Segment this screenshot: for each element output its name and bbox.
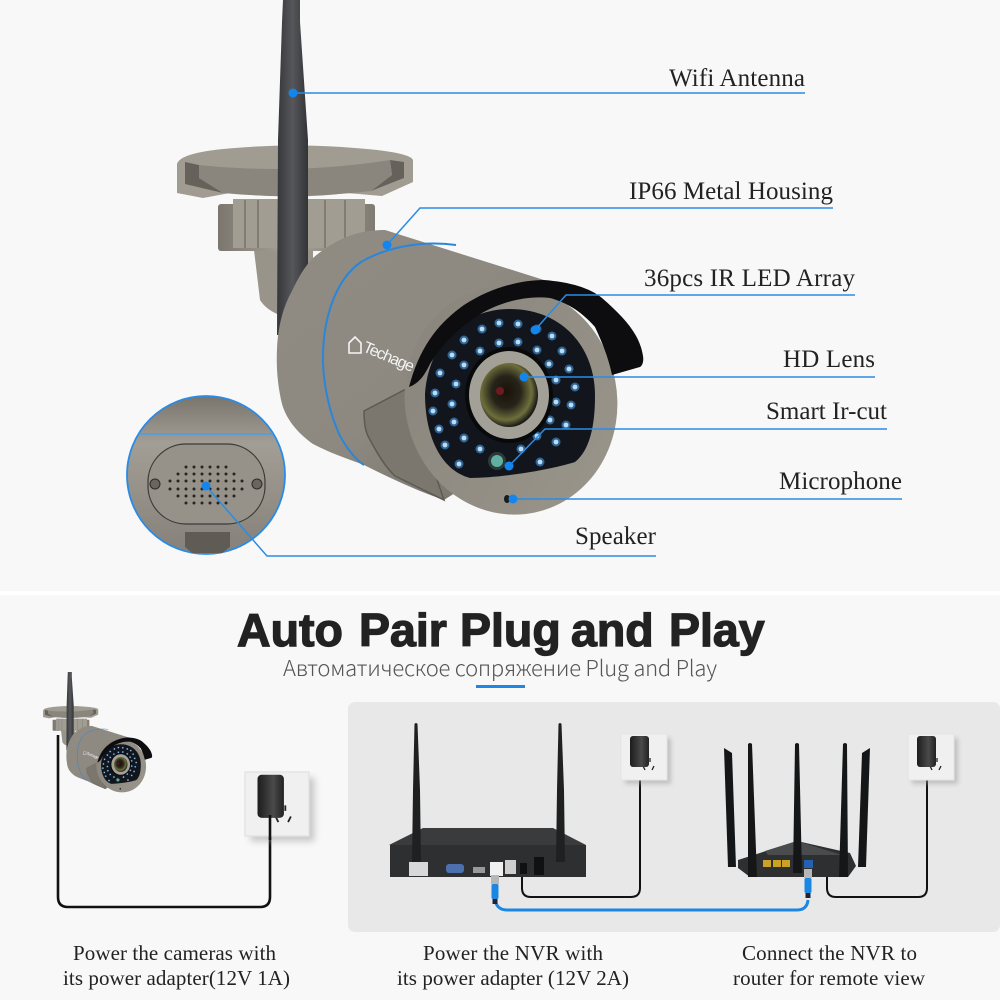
- NVR antennas: [412, 723, 421, 862]
- speaker grille holes: [168, 466, 244, 504]
- router antennas: [724, 748, 736, 867]
- speaker plate: [148, 444, 265, 524]
- step 1 diagram: camera to power outlet: [43, 672, 314, 907]
- security camera illustration: [177, 0, 643, 535]
- caption: step 3: router for remote view: [733, 966, 926, 990]
- caption: step 3: Connect the NVR to: [742, 941, 917, 965]
- speaker bracket: [185, 532, 230, 553]
- white divider band: [0, 591, 1000, 595]
- wall socket with adapter: [245, 772, 314, 842]
- caption: step 3: [733, 941, 926, 990]
- caption: step 1: [63, 941, 290, 990]
- router LAN ports: [763, 860, 790, 867]
- RJ45 plug: router side: [804, 869, 812, 898]
- caption: step 2: [397, 941, 629, 990]
- callout: Speaker: Speaker: [575, 523, 657, 550]
- bottom background panel: [0, 595, 1000, 1000]
- callout: Speaker: [202, 482, 657, 556]
- blue network cable: [495, 900, 808, 910]
- wall socket: router: [908, 734, 958, 784]
- accent bar: [476, 685, 525, 688]
- power cable over socket: [269, 815, 271, 840]
- subtitle: Автоматическое сопряжение Plug and Play: [283, 651, 717, 683]
- callout: Smart Ir-cut: [504, 398, 887, 470]
- NVR recorder: [389, 723, 586, 877]
- caption: step 2: Power the NVR with: [423, 941, 604, 965]
- NVR power cable: [522, 762, 640, 897]
- cable: camera power: [58, 735, 270, 907]
- panel: NVR and router connection: [348, 702, 1000, 932]
- callout: IP66 Metal Housing: [382, 178, 834, 250]
- caption: step 1: its power adapter(12V 1A): [63, 966, 290, 990]
- RJ45 plug: NVR side: [491, 875, 499, 904]
- router WAN port: [804, 860, 813, 868]
- caption: step 1: Power the cameras with: [73, 941, 276, 965]
- title: Play: [669, 604, 765, 656]
- top background panel: [0, 0, 1000, 591]
- title: Plug: [460, 604, 561, 656]
- title: and: [571, 604, 654, 656]
- inset: speaker close-up: [127, 396, 285, 554]
- NVR ports: [409, 857, 544, 876]
- callout: HD Lens: HD Lens: [783, 346, 875, 373]
- title: Auto: [237, 604, 343, 656]
- caption: step 2: its power adapter (12V 2A): [397, 966, 629, 990]
- speaker screws: [150, 479, 262, 489]
- title: Pair: [359, 604, 447, 656]
- callout: Wifi Antenna: [288, 65, 805, 98]
- callout: 36pcs IR LED Array: [530, 265, 856, 334]
- callout: Smart Ir-cut: Smart Ir-cut: [766, 398, 887, 425]
- callout: HD Lens: [520, 346, 875, 382]
- callout: 36pcs IR LED Array: 36pcs IR LED Array: [644, 265, 856, 292]
- callout: Microphone: Microphone: [779, 468, 902, 495]
- callout: Wifi Antenna: Wifi Antenna: [669, 65, 805, 92]
- callout: IP66 Metal Housing: IP66 Metal Housing: [629, 178, 834, 205]
- router: [724, 743, 870, 877]
- small camera: [43, 672, 152, 797]
- wall socket: NVR: [621, 734, 671, 784]
- callout: Microphone: [508, 468, 902, 504]
- router power cable: [827, 762, 927, 897]
